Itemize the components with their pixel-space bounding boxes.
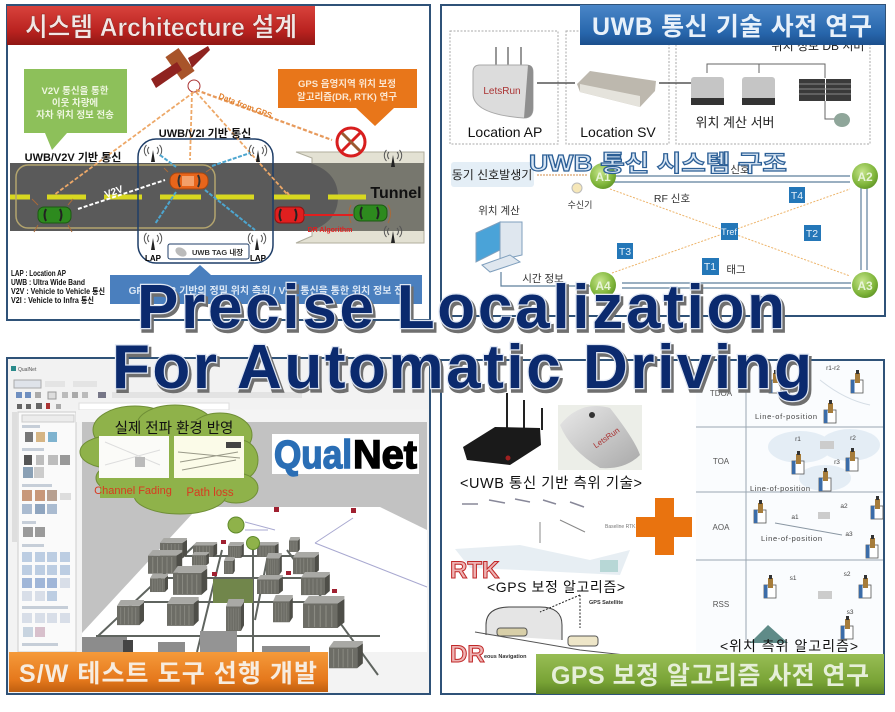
algorithm table: TDOA — [710, 389, 733, 398]
RSS diagram — [750, 571, 871, 643]
label: location AP: Location AP — [468, 124, 542, 140]
V2I zone — [138, 139, 273, 263]
time badges: Tref — [721, 227, 737, 237]
sidebar — [12, 412, 76, 652]
arrow: AP to SV — [537, 82, 575, 84]
no GPS sign — [337, 128, 365, 156]
cloud callout: Path loss — [186, 487, 234, 499]
arrow: SV to server — [659, 82, 692, 84]
buildings — [82, 537, 363, 668]
QualNet logo — [272, 433, 419, 477]
TDOA diagram: Line-of-position — [755, 412, 817, 421]
orange callout: GPS shadow: GPS 음영지역 위치 보정 — [298, 78, 396, 90]
satellite — [151, 46, 210, 92]
label: data from GPS: Data from GPS — [217, 91, 274, 120]
TOA diagram: r3 — [834, 459, 840, 466]
caption: positioning algorithm: <위치 측위 알고리즘> — [720, 638, 858, 654]
anchors A1-A4 — [590, 163, 878, 298]
simulation canvas — [76, 410, 427, 675]
algorithm table — [696, 361, 883, 653]
DR label: DR — [450, 641, 485, 668]
title line 1: Precise Localization — [139, 276, 787, 345]
V2V arrow and label — [78, 180, 165, 209]
TOA diagram: Line-of-position — [750, 484, 810, 493]
header: GPS correction — [536, 654, 884, 694]
link lines between anchors — [501, 175, 867, 288]
green callout: V2V: V2V 통신을 통한 — [42, 85, 109, 97]
anchors A1-A4: A3 — [857, 279, 873, 293]
red link: DR algorithm: DR Algorithm — [308, 227, 352, 234]
header: system architecture: 시스템 Architecture 설계 — [25, 12, 297, 42]
DR diagram: GPS Satellite — [589, 600, 623, 606]
QualNet logo: Net — [353, 433, 417, 477]
orange callout: GPS shadow: 알고리즘(DR, RTK) 연구 — [297, 91, 397, 103]
panel: UWB research — [441, 5, 885, 316]
TOA diagram: r2 — [850, 435, 856, 442]
RTK diagram: Baseline RTK data — [605, 524, 647, 530]
algorithm table: TOA — [713, 457, 730, 466]
algorithm table: RSS — [713, 600, 729, 609]
label: signal: 신호 — [730, 164, 750, 176]
red markers — [212, 507, 356, 593]
UWB tag box: UWB TAG 내장 — [192, 247, 243, 257]
header: software test tool: S/W 테스트 도구 선행 개발 — [19, 660, 317, 688]
LAP antennas: LAP — [145, 254, 162, 263]
label: time info: 시간 정보 — [522, 273, 564, 285]
device: location AP: LetsRun — [483, 86, 521, 97]
cloud callout: 실제 전파 환경 반영 — [115, 420, 233, 437]
legend — [11, 269, 105, 305]
TDOA diagram: r1-r2 — [826, 365, 840, 372]
time badges: T1 — [704, 261, 716, 273]
cloud callout: Channel Fading — [94, 485, 172, 497]
TDOA diagram — [755, 365, 870, 423]
device: location SV — [577, 71, 656, 107]
title line 2: For Automatic Driving — [112, 333, 812, 402]
QualNet logo: Qual — [274, 433, 352, 477]
time badges: T2 — [806, 228, 818, 240]
label: tunnel: Tunnel — [370, 185, 422, 202]
toolbar: QualNet — [18, 367, 37, 373]
dashed boxes — [450, 31, 870, 144]
tunnel road — [10, 152, 424, 243]
RTK diagram — [455, 499, 647, 575]
AOA diagram: Line-of-position — [761, 534, 822, 543]
legend: LAP : Location AP — [11, 269, 67, 278]
UWB tag box — [168, 244, 249, 259]
green callout: V2V: 이웃 차량에 — [52, 97, 98, 109]
red link: DR algorithm — [287, 192, 353, 234]
label: position server: 위치 계산 서버 — [696, 115, 774, 130]
AOA diagram: a2 — [840, 503, 848, 510]
caption: UWB: <UWB 통신 기반 측위 기술> — [460, 475, 642, 492]
orange RF signal lines — [610, 189, 850, 276]
label: calculation: 위치 계산 — [478, 204, 520, 217]
network lines — [245, 518, 427, 587]
title line 2: For Automatic Driving — [114, 336, 814, 405]
blue banner: GPS/UWB 기반의 정밀 위치 측위 / V2V 통신을 통한 위치 정보 전 — [129, 284, 403, 297]
RTK label: RTK — [450, 557, 500, 584]
LAP antennas: LAP — [250, 254, 267, 263]
computer icon — [476, 222, 522, 272]
router photo — [463, 393, 542, 465]
receiver: 수신기 — [568, 200, 592, 210]
time badges — [617, 187, 821, 275]
subtitle: UWB system structure: UWB 통신 시스템 구조 — [529, 150, 787, 176]
caption: GPS correction: <GPS 보정 알고리즘> — [487, 579, 625, 595]
DB servers — [691, 64, 851, 127]
AOA diagram: a3 — [845, 531, 853, 538]
label: location SV: Location SV — [580, 124, 656, 140]
legend: UWB : Ultra Wide Band — [11, 278, 85, 287]
panel: system architecture — [7, 5, 430, 320]
anchors A1-A4: A2 — [857, 170, 873, 184]
time badges: T4 — [791, 190, 803, 202]
time badges: T3 — [619, 246, 631, 258]
LAP antennas — [144, 145, 402, 263]
TOA diagram: r1 — [795, 436, 801, 443]
RSS diagram: s1 — [790, 575, 797, 582]
blue arrows — [155, 153, 255, 230]
receiver — [568, 183, 592, 210]
legend: V2I : Vehicle to Infra 통신 — [11, 295, 94, 305]
orange plus — [636, 498, 692, 555]
label: tag: 태그 — [726, 264, 746, 276]
RSS diagram: s3 — [847, 609, 854, 616]
UWB tag photo — [558, 405, 642, 470]
TOA diagram — [750, 429, 880, 493]
heading: UWB/V2V: UWB/V2V 기반 통신 — [25, 150, 121, 164]
sync generator — [451, 162, 534, 187]
header: GPS correction: GPS 보정 알고리즘 사전 연구 — [551, 662, 869, 690]
panel: software test tool — [7, 358, 430, 694]
DR diagram: eous Navigation — [484, 654, 527, 660]
DR diagram — [475, 595, 625, 660]
cars — [32, 168, 390, 232]
label: DB server: 위치 정보 DB 서버 — [772, 39, 864, 53]
cloud callout — [80, 405, 258, 514]
UWB tag photo: LetsRun — [592, 426, 621, 450]
algorithm table: AOA — [713, 523, 730, 532]
V2V zone — [16, 165, 215, 228]
label: RF signal: RF 신호 — [654, 193, 690, 205]
header: software test tool — [9, 652, 328, 692]
panel: GPS correction research — [441, 360, 884, 694]
device: location AP — [473, 47, 533, 118]
sync generator: 동기 신호발생기 — [452, 168, 532, 182]
anchors A1-A4: A4 — [595, 279, 611, 293]
blue banner — [110, 265, 422, 304]
V2V arrow and label: V2V — [103, 184, 125, 201]
RSS diagram: s2 — [844, 571, 851, 578]
anchors A1-A4: A1 — [595, 170, 611, 184]
green callout: V2V: 자차 위치 정보 전송 — [36, 109, 114, 121]
orange callout: GPS shadow — [278, 69, 417, 126]
heading: UWB/V2I: UWB/V2I 기반 통신 — [159, 126, 251, 140]
toolbar — [8, 359, 429, 410]
AOA diagram: a1 — [791, 514, 799, 521]
green callout: V2V — [24, 69, 127, 150]
legend: V2V : Vehicle to Vehicle 통신 — [11, 286, 105, 296]
header: UWB research — [580, 5, 885, 45]
small green clusters — [228, 517, 260, 550]
GPS signal lines — [54, 90, 332, 195]
header: UWB research: UWB 통신 기술 사전 연구 — [592, 13, 872, 41]
AOA diagram — [754, 496, 883, 558]
main title — [112, 273, 814, 405]
title line 1: Precise Localization — [137, 273, 785, 342]
